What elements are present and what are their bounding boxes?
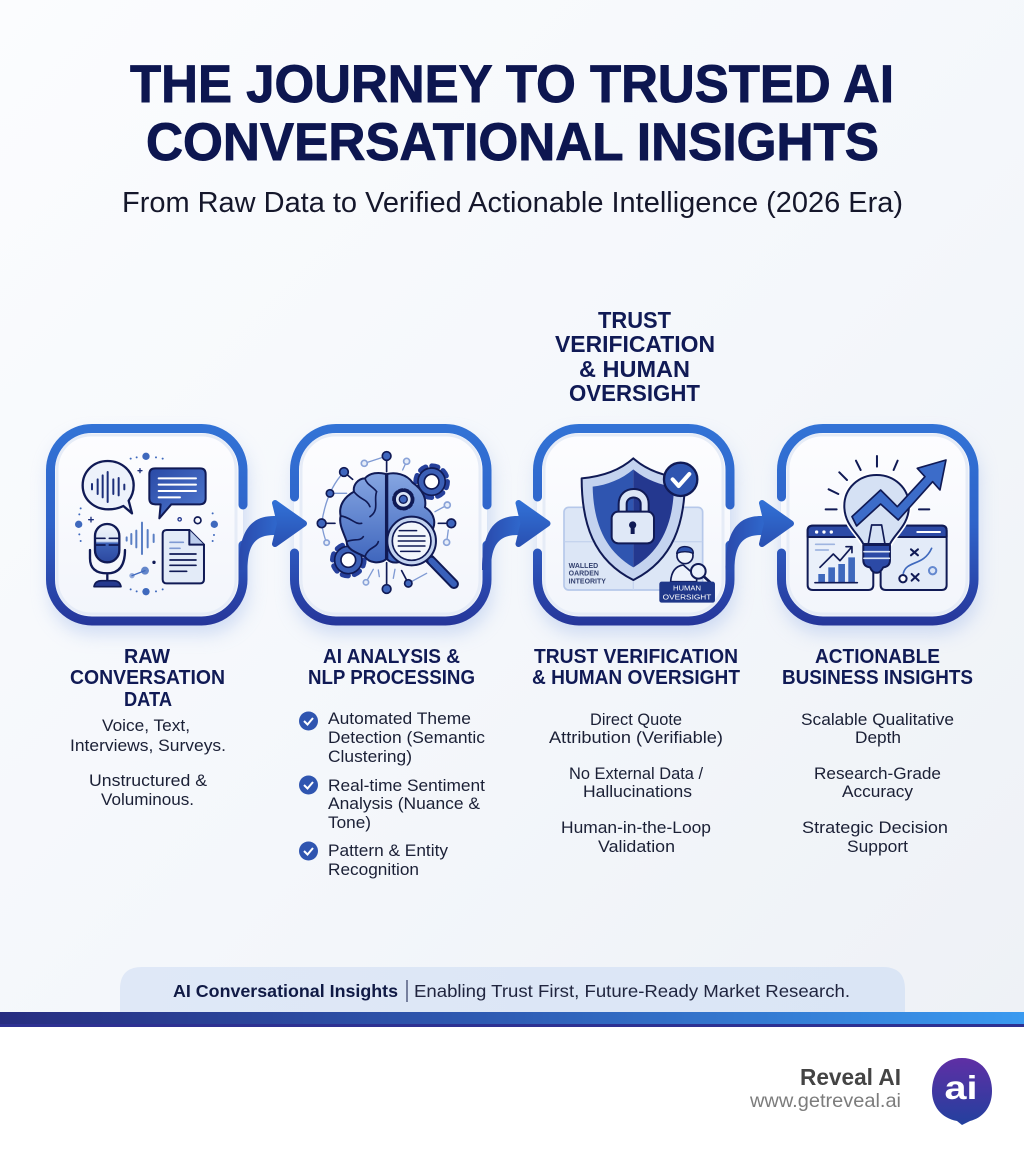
icon: shield with lock and human oversight: WALLED — [569, 563, 598, 570]
title: THE JOURNEY TO TRUSTED AI — [130, 55, 894, 114]
subtitle: From Raw Data to Verified Actionable Intelligence (2026 Era) — [122, 187, 903, 219]
text block: trust points — [549, 711, 723, 856]
icon: check 2 — [299, 776, 318, 794]
text block: insight points: Strategic Decision — [802, 819, 948, 837]
icon: shield with lock and human oversight: OARDEN — [569, 571, 599, 578]
text block: raw data description: Voice, Text, — [102, 717, 190, 735]
text block: insight points: Depth — [855, 729, 901, 747]
icon: conversation data — [75, 453, 218, 595]
panel: card 3 frame — [537, 428, 730, 621]
title: CONVERSATIONAL INSIGHTS — [146, 113, 879, 172]
text block: insight points: Research-Grade — [814, 765, 941, 783]
icon: shield with lock and human oversight: HUMAN — [673, 584, 701, 593]
icon: check 3 — [299, 842, 318, 860]
list: AI analysis points: Recognition — [328, 861, 419, 879]
panel: card shadows — [50, 436, 979, 634]
floating heading: trust verification: OVERSIGHT — [569, 380, 700, 406]
heading: actionable insights: BUSINESS INSIGHTS — [782, 667, 973, 689]
heading: actionable insights — [782, 646, 973, 689]
list: AI analysis points: Real-time Sentiment — [328, 777, 485, 795]
list: AI analysis points — [299, 710, 485, 879]
text block: trust points: No External Data / — [569, 765, 703, 783]
text block: insight points — [801, 711, 954, 856]
heading: raw conversation data — [70, 646, 225, 711]
text block: raw data description: Interviews, Surveys. — [70, 737, 226, 755]
icon: shield with lock and human oversight — [564, 458, 715, 603]
icon: AI brain with gears and magnifier — [317, 452, 456, 593]
floating heading: trust verification: TRUST — [598, 307, 671, 333]
logo: ai — [944, 1069, 978, 1106]
list: AI analysis points: Automated Theme — [328, 710, 471, 728]
title — [130, 55, 894, 172]
icon: check 1 — [299, 712, 318, 730]
heading: trust verification — [532, 646, 740, 689]
icon: light bulb with growth arrow and dashboards — [808, 456, 947, 590]
heading: trust verification: TRUST VERIFICATION — [534, 646, 738, 668]
text block: trust points: Hallucinations — [583, 783, 692, 801]
text block: insight points: Accuracy — [842, 783, 914, 801]
heading: AI analysis: NLP PROCESSING — [308, 667, 475, 689]
footer banner — [120, 967, 905, 1012]
text block: insight points: Support — [847, 838, 908, 856]
footer banner: AI Conversational Insights — [173, 981, 398, 1001]
heading: trust verification: & HUMAN OVERSIGHT — [532, 667, 740, 689]
heading: raw conversation data: CONVERSATION — [70, 667, 225, 689]
heading: AI analysis — [308, 646, 475, 689]
list: AI analysis points: Tone) — [328, 814, 371, 832]
text block: trust points: Attribution (Verifiable) — [549, 729, 723, 747]
gradient band — [0, 1012, 1024, 1027]
arrow: card 2 to card 3 — [482, 503, 548, 570]
heading: raw conversation data: RAW — [124, 646, 170, 668]
brand text: Reveal AI — [800, 1064, 901, 1090]
list: AI analysis points: Detection (Semantic — [328, 729, 485, 747]
brand text — [749, 1064, 901, 1112]
floating heading: trust verification: VERIFICATION — [555, 331, 715, 357]
heading: actionable insights: ACTIONABLE — [815, 646, 940, 668]
text block: raw data description: Voluminous. — [101, 791, 194, 809]
footer banner: Enabling Trust First, Future-Ready Market Research. — [414, 981, 850, 1001]
list: AI analysis points: Pattern & Entity — [328, 842, 449, 860]
footer white area — [0, 1027, 1024, 1154]
icon: shield with lock and human oversight: INTEORITY — [569, 579, 606, 586]
heading: AI analysis: AI ANALYSIS & — [323, 646, 460, 668]
heading: raw conversation data: DATA — [124, 689, 172, 711]
text block: trust points: Direct Quote — [590, 711, 682, 729]
logo — [932, 1058, 992, 1125]
text block: raw data description — [70, 717, 226, 809]
arrow: card 3 to card 4 — [726, 503, 791, 570]
list: AI analysis points: Clustering) — [328, 748, 412, 766]
text block: raw data description: Unstructured & — [89, 772, 207, 790]
brand text: www.getreveal.ai — [749, 1090, 901, 1112]
list: AI analysis points: Analysis (Nuance & — [328, 795, 480, 813]
floating heading: trust verification — [555, 307, 715, 406]
panel: card 2 frame — [294, 428, 487, 621]
floating heading: trust verification: & HUMAN — [579, 356, 690, 382]
text block: trust points: Human-in-the-Loop — [561, 819, 711, 837]
arrow: card 1 to card 2 — [238, 503, 304, 570]
panel: card 4 frame — [781, 428, 974, 621]
icon: shield with lock and human oversight: OVERSIGHT — [663, 592, 712, 601]
panel: card 1 frame — [50, 428, 243, 621]
text block: insight points: Scalable Qualitative — [801, 711, 954, 729]
text block: trust points: Validation — [598, 838, 675, 856]
